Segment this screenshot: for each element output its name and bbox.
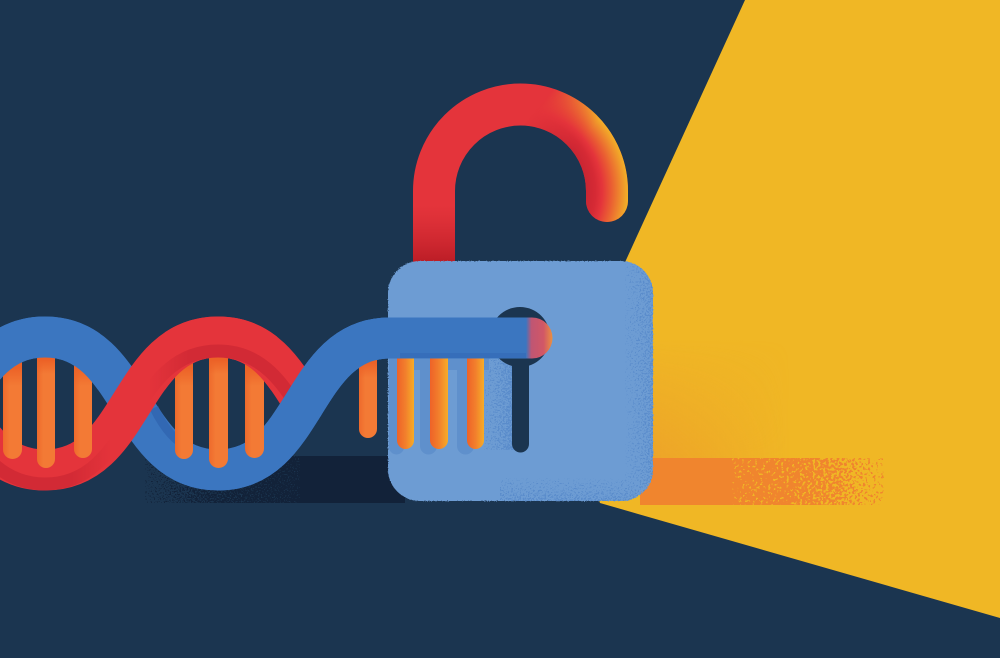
keyhole bbox=[490, 307, 550, 452]
dark ground shadow bbox=[145, 456, 405, 503]
blue DNA strand bbox=[0, 337, 390, 470]
glow on beam bbox=[652, 387, 738, 458]
shadow strips on lock bbox=[389, 358, 489, 455]
rung top shading bbox=[3, 340, 377, 386]
padlock shackle bbox=[413, 104, 607, 270]
padlock body bbox=[388, 261, 653, 501]
keyhole shadow bbox=[484, 358, 514, 450]
red DNA strand bbox=[0, 337, 390, 484]
blue strand shading bbox=[154, 408, 190, 448]
light beam bbox=[562, 0, 1000, 618]
red strand top arc over rungs bbox=[165, 316, 277, 390]
base pair rungs on lock bbox=[397, 340, 484, 449]
blue strand top arc over rungs bbox=[0, 316, 100, 390]
base pair rungs in helix bbox=[3, 340, 377, 468]
orange lock shadow on beam bbox=[640, 458, 885, 505]
DNA strand entering keyhole bbox=[298, 318, 552, 420]
lock edge grain bbox=[500, 261, 653, 501]
blue strand over red crossing bbox=[220, 318, 388, 490]
